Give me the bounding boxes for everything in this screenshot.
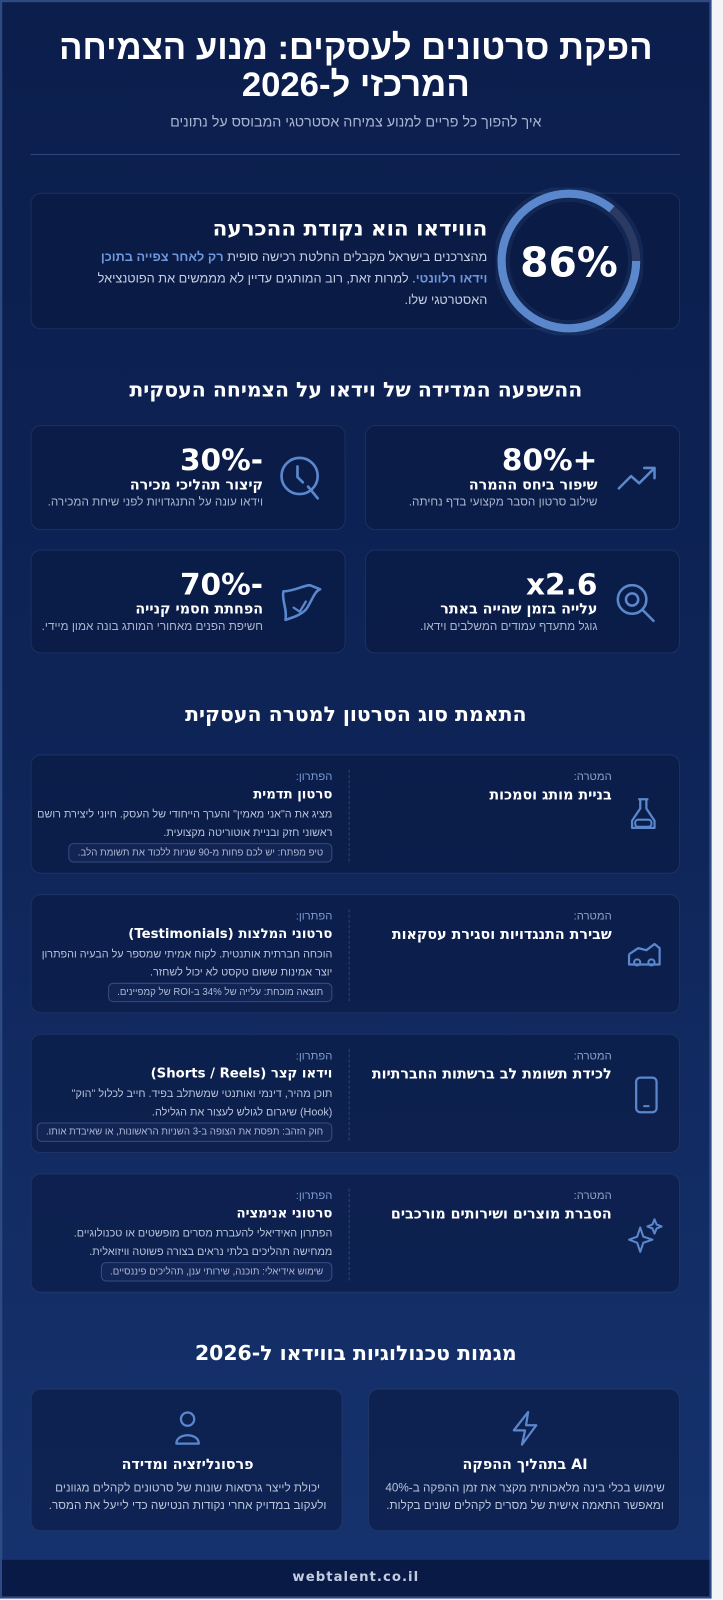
text block: hero body: מהצרכנים בישראל מקבלים החלטת רכישה סופית רק לאחר צפייה בתוכן וידאו רלוונטי. למרות זאת, רוב המותגים עדיין לא מממשים את הפוטנציאל האסטרטגי שלו. [98,250,487,307]
panel: goal brand: טיפ מפתח: יש לכם פחות מ-90 שניות ללכוד את תשומת הלב. [78,847,323,858]
panel: goal objections: המטרה: [574,910,612,923]
icon: shield [282,584,322,622]
icon: sparkles [628,1218,663,1253]
heading: match video type: התאמת סוג הסרטון למטרה העסקית [185,701,527,726]
panel: goal complex: הפתרון: [296,1190,332,1202]
panel: hero stat [31,193,680,329]
icon: search [616,584,655,622]
panel: goal social [31,1034,680,1153]
panel: goal brand: המטרה: [574,771,612,783]
icon: clock [280,456,320,500]
icon: lightning [512,1410,538,1446]
heading: impact: ההשפעה המדידה של וידאו על הצמיחה העסקית [129,377,582,402]
panel: goal brand: סרטון תדמית [253,787,332,802]
panel: stat barriers: הפחתת חסמי קנייה [135,602,263,618]
panel: stat conversion: 80%+ [502,442,597,477]
panel: stat time on site [365,550,680,653]
chart: 86% ring [496,188,644,336]
chart: 86% ring: 86% [520,238,618,286]
panel: stat sales cycle: 30%- [180,442,263,477]
title [59,29,653,104]
panel: goal objections: תוצאה מוכחת: עלייה של 34% ב-ROI של קמפיינים. [117,987,323,998]
footer: webtalent.co.il [292,1570,419,1585]
panel: goal objections [31,894,680,1013]
panel: goal complex: שימוש אידיאלי: תוכנה, שירותי ענן, תהליכים פיננסיים. [110,1266,323,1277]
panel: stat barriers: חשיפת הפנים מאחורי המותג בונה אמון מיידי. [42,621,263,633]
panel: personalization trend: יכולת לייצר גרסאות שונות של סרטונים לקהלים מגוונים ולעקוב במדויק אחרי נקודות הנטישה כדי לייעל את המסר. [49,1482,326,1512]
panel: goal brand: מציג את ה"אני מאמין" והערך הייחודי של העסק. חיוני ליצירת רושם ראשוני חזק ובניית אוטוריטה מקצועית. [37,808,332,839]
panel: stat sales cycle [31,425,346,530]
panel: goal social: תוכן מהיר, דינמי ואותנטי שמשתלב בפיד. חייב לכלול "הוק" (Hook) שיגרום לגולש לעצור את הגלילה. [72,1088,332,1118]
panel: stat time on site: x2.6 [526,567,597,602]
panel: goal brand [31,754,680,874]
panel: goal complex: הפתרון האידיאלי להעברת מסרים מופשטים או טכנולוגיים. ממחישה תהליכים בלתי נראים בצורה פשוטה וויזואלית. [74,1227,332,1258]
panel: goal complex: הסברת מוצרים ושירותים מורכבים [391,1206,612,1222]
panel: stat barriers: 70%- [180,567,263,602]
panel: stat conversion [365,425,680,530]
panel: goal objections: הוכחה חברתית אותנטית. לקוח אמיתי שמספר על הבעיה והפתרון יוצר אמינות ששום טקסט לא יכול לשחזר. [42,948,332,979]
panel: goal complex: המטרה: [574,1190,612,1202]
panel: goal social: לכידת תשומת לב ברשתות החברתיות [372,1066,612,1083]
panel: goal social: וידאו קצר (Shorts / Reels) [151,1066,332,1082]
panel: personalization trend [31,1389,343,1531]
panel: goal complex: סרטוני אנימציה [236,1206,332,1221]
panel: stat conversion: שילוב סרטון הסבר מקצועי בדף נחיתה. [409,496,597,509]
icon: phone [635,1076,658,1114]
icon: flask [631,798,656,829]
panel: stat time on site: גוגל מתעדף עמודים המשלבים וידאו. [420,621,597,633]
panel: goal social: חוק הזהב: תפסת את הצופה ב-3 השניות הראשונות, או שאיבדת אותו. [46,1127,323,1138]
panel: goal social: המטרה: [574,1050,612,1062]
panel: stat conversion: שיפור ביחס ההמרה [469,477,597,493]
panel: goal brand: הפתרון: [296,771,332,783]
footer [2,1560,710,1597]
subtitle: איך להפוך כל פריים למנוע צמיחה אסטרטגי המבוסס על נתונים [170,113,542,129]
panel: AI trend: שימוש בכלי בינה מלאכותית מקצר את זמן ההפקה ב-40% ומאפשר התאמה אישית של מסרים לקהלים שונים בקלות. [385,1482,665,1512]
panel: goal brand: בניית מותג וסמכות [489,787,612,803]
panel: stat sales cycle: קיצור תהליכי מכירה [130,477,263,493]
heading: tech trends: מגמות טכנולוגיות בווידאו ל-2026 [195,1341,517,1365]
title: הפקת סרטונים לעסקים: מנוע הצמיחה [59,29,653,67]
panel: goal complex [31,1173,680,1293]
panel: goal objections: שבירת התנגדויות וסגירת עסקאות [392,927,612,943]
panel: stat barriers [31,550,346,653]
panel: stat sales cycle: וידאו עונה על התנגדויות לפני שיחת המכירה. [48,496,263,509]
panel: stat time on site: עלייה בזמן שהייה באתר [440,602,597,618]
heading: video decision point: הווידאו הוא נקודת ההכרעה [213,216,487,241]
icon: trend [618,466,656,490]
panel: AI trend: AI בתהליך ההפקה [463,1457,588,1473]
title: המרכזי ל-2026 [242,65,470,104]
panel: goal objections: סרטוני המלצות (Testimonials) [128,927,332,942]
panel: goal objections: הפתרון: [296,910,332,923]
icon: handshake [628,942,661,966]
panel: goal social: הפתרון: [296,1050,332,1062]
icon: person [175,1411,200,1445]
panel: personalization trend: פרסונליזציה ומדידה [122,1457,254,1473]
panel: AI trend [368,1389,680,1531]
